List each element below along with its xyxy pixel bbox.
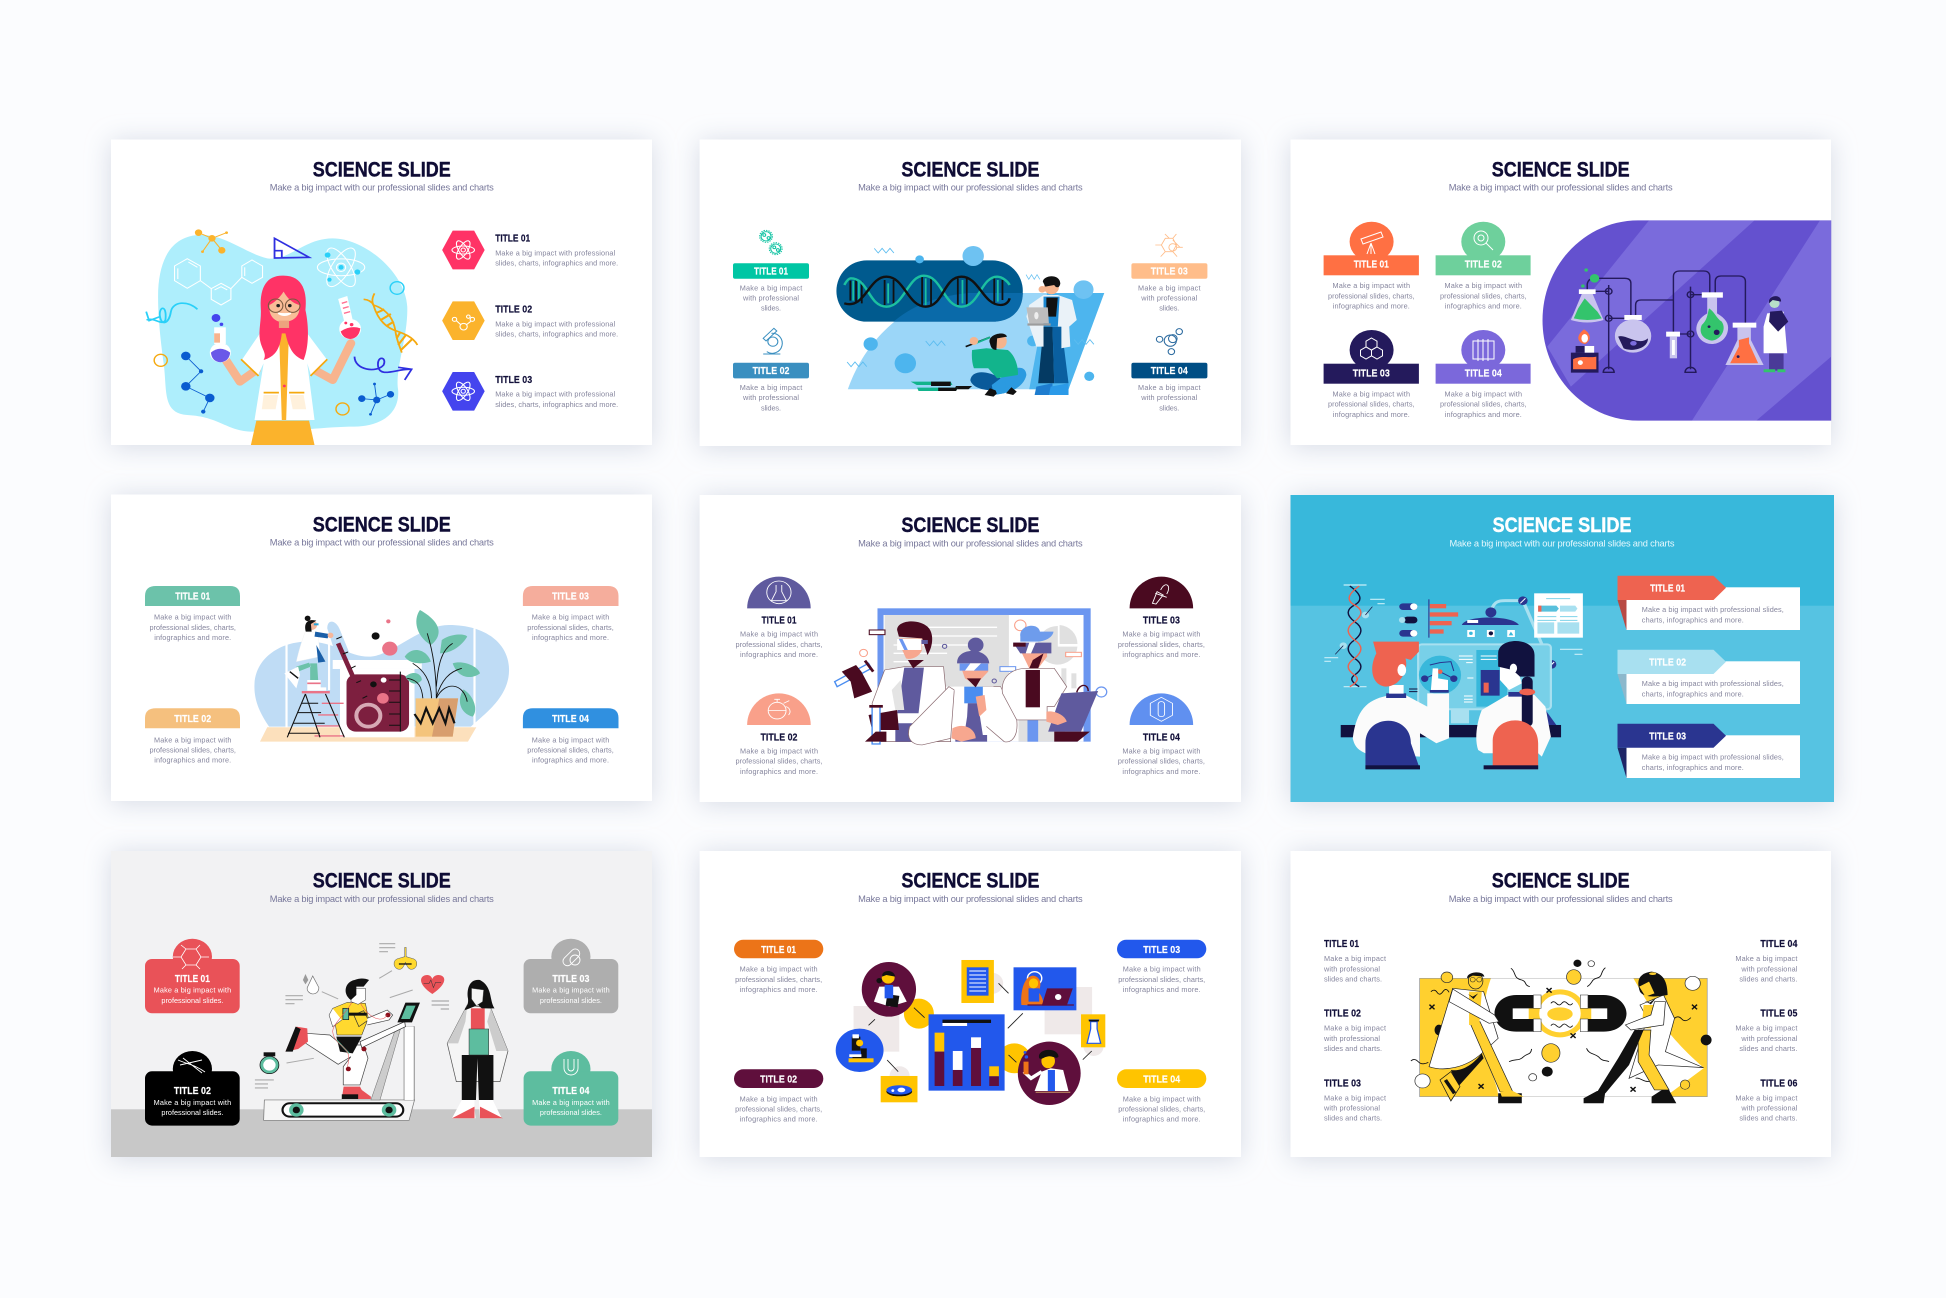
text: title 01 body (735, 965, 822, 994)
text: title 02 body: infographics and more. (1445, 301, 1522, 310)
panel: slide 1 hexagon list (111, 140, 652, 445)
illustration: two researchers at a display (1324, 585, 1583, 769)
text block: title 01: TITLE 01 (495, 233, 530, 245)
text: title 03 body: professional slides, charts, (527, 623, 614, 632)
text block: title 02 body: slides. (761, 403, 781, 412)
illustration: runner on treadmill and doctor (255, 944, 508, 1120)
text: title 02 body: Make a big impact with (154, 735, 231, 744)
text: title 06: TITLE 06 (1760, 1077, 1798, 1089)
bar: title 02: TITLE 02 (752, 365, 790, 377)
text block: title 02: slides, charts, infographics and more. (495, 330, 618, 339)
text: title 03 body: professional slides, charts, (1118, 975, 1205, 984)
text: title 04: TITLE 04 (1143, 732, 1180, 744)
card: title 03: Make a big impact with (532, 986, 610, 995)
text: title 03: Make a big impact with (1122, 630, 1200, 639)
text: title 01 body: infographics and more. (740, 985, 818, 994)
text: title 05: slides and charts. (1739, 1044, 1797, 1053)
pill: title 01 (734, 940, 823, 958)
text: title 03: with professional (1323, 1103, 1380, 1112)
card: title 01: TITLE 01 (175, 973, 210, 985)
text: title 03: infographics and more. (1122, 650, 1200, 659)
text: title 03 body: infographics and more. (1123, 985, 1201, 994)
illustration: DNA capsule and two researchers (836, 246, 1104, 397)
text: title 06 (1735, 1077, 1798, 1122)
text: title 01 body: professional slides, charts, (1328, 291, 1415, 300)
text block: title 01: slides, charts, infographics and more. (495, 259, 618, 268)
title: SCIENCE SLIDE (1492, 514, 1632, 537)
text block: title 02: TITLE 02 (495, 303, 532, 315)
card: title 01 ribbon: Make a big impact with professional slides, (1642, 605, 1784, 614)
bar: title 04 (1131, 363, 1207, 378)
text: title 03 body: Make a big impact with (532, 613, 609, 622)
card: title 03 ribbon: Make a big impact with professional slides, (1642, 753, 1784, 762)
panel: slide 2 DNA research (700, 140, 1241, 446)
subtitle: Make a big impact with our professional slides and charts (1449, 183, 1673, 193)
card: title 03: TITLE 03 (1353, 367, 1390, 379)
icon: semicircle flask purple (747, 577, 811, 608)
subtitle: Make a big impact with our professional slides and charts (858, 539, 1083, 549)
card: title 02 (1436, 222, 1531, 275)
card: title 02 (145, 1051, 240, 1126)
text: title 03 body (1328, 390, 1415, 419)
text: title 02 body: Make a big impact with (740, 1094, 818, 1103)
text: title 03: Make a big impact (1324, 1093, 1386, 1102)
text: title 04 body: infographics and more. (532, 756, 609, 765)
text: title 05: with professional (1740, 1034, 1798, 1043)
text: title 03: professional slides, charts, (1118, 640, 1205, 649)
panel: slide 8 connected research (700, 851, 1241, 1157)
text: title 03: TITLE 03 (1143, 615, 1180, 627)
text: title 06: slides and charts. (1739, 1113, 1797, 1122)
card: title 03 ribbon (1618, 724, 1800, 778)
text: title 04 body: Make a big impact with (1123, 1094, 1201, 1103)
text block: title 04 body (1138, 383, 1201, 412)
pill: title 04: TITLE 04 (1143, 1073, 1180, 1085)
text: title 04 body: professional slides, charts, (1118, 1104, 1205, 1113)
text: title 01 body: infographics and more. (154, 633, 231, 642)
text block: title 02 body: Make a big impact (740, 383, 802, 392)
card: title 02: Make a big impact with (154, 1098, 231, 1107)
pill: title 01: TITLE 01 (761, 944, 796, 956)
text block: title 01 body: with professional (742, 294, 799, 303)
icon: semicircle dropper (1130, 577, 1193, 608)
card: title 01 (145, 939, 240, 1013)
pill: title 03 (1117, 940, 1206, 958)
tab: title 01 (145, 586, 240, 606)
text: title 03 body: infographics and more. (532, 633, 609, 642)
card: title 04: Make a big impact with (532, 1098, 610, 1107)
text: title 02: infographics and more. (740, 767, 818, 776)
text: title 03 body: Make a big impact with (1123, 965, 1201, 974)
text block: title 01 body: Make a big impact (740, 283, 802, 292)
text: title 04: Make a big impact (1735, 954, 1797, 963)
text: title 02: slides and charts. (1324, 1044, 1382, 1053)
text block: title 01: Make a big impact with professional (495, 248, 616, 257)
text: title 04 (1118, 732, 1205, 776)
text: title 01 body: Make a big impact with (154, 613, 231, 622)
text: title 01: with professional (1323, 964, 1380, 973)
illustration: scientist with flasks (146, 229, 417, 445)
text block: title 03 body: slides. (1159, 304, 1179, 313)
panel: slide 5 research team (700, 495, 1241, 802)
text: title 02 body: Make a big impact with (1445, 281, 1522, 290)
text: title 04: with professional (1740, 964, 1798, 973)
card: title 03 (1324, 330, 1419, 384)
text: title 03 body (1118, 965, 1205, 994)
panel: slide 9 magnets tug of war (1290, 851, 1831, 1157)
text block: title 03 body: Make a big impact (1138, 283, 1201, 292)
text: title 01: Make a big impact (1324, 954, 1386, 963)
text: title 02 body: professional slides, charts, (1440, 291, 1527, 300)
diagram: connected chart and researcher circles (836, 960, 1105, 1105)
title: SCIENCE SLIDE (1492, 158, 1630, 181)
card: title 02 ribbon: TITLE 02 (1649, 656, 1686, 668)
title: SCIENCE SLIDE (313, 869, 451, 892)
text: title 04: infographics and more. (1122, 767, 1200, 776)
subtitle: Make a big impact with our professional slides and charts (270, 538, 494, 548)
text: title 06: Make a big impact (1735, 1093, 1797, 1102)
text: title 01 body: Make a big impact with (1333, 281, 1410, 290)
text: title 02: TITLE 02 (760, 732, 798, 744)
text block: title 03: TITLE 03 (495, 374, 532, 386)
text: title 05: Make a big impact (1735, 1024, 1797, 1033)
title: SCIENCE SLIDE (901, 869, 1039, 892)
text: title 02: Make a big impact (1324, 1024, 1386, 1033)
text: title 01: TITLE 01 (762, 615, 797, 627)
text: title 04: TITLE 04 (1760, 938, 1798, 950)
text: title 01 body (1328, 281, 1415, 310)
text: title 01: TITLE 01 (1324, 938, 1359, 950)
icon: hexagon molecule (1155, 234, 1183, 257)
card: title 01 ribbon: charts, infographics and more. (1642, 615, 1744, 624)
card: title 02 ribbon (1618, 650, 1800, 704)
text block: title 02: Make a big impact with professional (495, 319, 616, 328)
text block: title 03 (495, 374, 618, 409)
illustration: purple lab apparatus (1543, 220, 1831, 421)
text: title 03: slides and charts. (1324, 1113, 1382, 1122)
panel: slide 7 treadmill test (111, 851, 652, 1157)
text: title 04 body: professional slides, charts, (527, 745, 614, 754)
text: title 01 body: Make a big impact with (740, 965, 818, 974)
icon: bacteria (760, 230, 782, 255)
text: title 02 body: professional slides, charts, (149, 745, 236, 754)
icon: linked molecule (1156, 329, 1182, 355)
icon: orange hexagon molecule (442, 301, 485, 340)
card: title 02: TITLE 02 (1465, 259, 1502, 271)
text: title 02: professional slides, charts, (736, 757, 822, 766)
tab: title 01: TITLE 01 (175, 591, 210, 603)
text block: title 04 body: slides. (1159, 403, 1179, 412)
text: title 04 body: Make a big impact with (1445, 390, 1522, 399)
text: title 01: infographics and more. (740, 650, 818, 659)
text: title 04 body: infographics and more. (1123, 1115, 1201, 1124)
text: title 02 body (1440, 281, 1527, 310)
text: title 03: TITLE 03 (1324, 1077, 1361, 1089)
card: title 01 ribbon (1618, 576, 1800, 630)
text: title 04 body: Make a big impact with (532, 735, 609, 744)
text: title 04: professional slides, charts, (1118, 757, 1205, 766)
text: title 02 (736, 732, 822, 776)
text block: title 02 body: with professional (742, 393, 799, 402)
card: title 01 ribbon: TITLE 01 (1650, 583, 1685, 595)
card: title 01: professional slides. (161, 996, 223, 1005)
text: title 03 (1323, 1077, 1386, 1122)
bar: title 01 (733, 263, 809, 279)
card: title 03 ribbon: charts, infographics and more. (1642, 763, 1744, 772)
card: title 04: TITLE 04 (552, 1085, 590, 1097)
illustration: scientist on ladder, beaker, plant (254, 610, 509, 742)
icon: semicircle flask salmon (747, 693, 811, 725)
text block: title 04 body: Make a big impact (1138, 383, 1201, 392)
illustration: three scientists and board (835, 608, 1107, 745)
bar: title 03: TITLE 03 (1151, 266, 1188, 278)
icon: blue hexagon atom (442, 372, 485, 411)
text: title 04: Make a big impact with (1122, 746, 1200, 755)
text: title 01 (1323, 938, 1386, 983)
bar: title 03 (1131, 263, 1207, 279)
text block: title 02 (495, 303, 618, 339)
subtitle: Make a big impact with our professional slides and charts (270, 183, 494, 193)
card: title 03: TITLE 03 (552, 973, 590, 985)
text block: title 01 body: slides. (761, 304, 781, 313)
text block: title 04 body: with professional (1140, 393, 1198, 402)
subtitle: Make a big impact with our professional slides and charts (858, 183, 1083, 193)
pill: title 03: TITLE 03 (1143, 944, 1180, 956)
card: title 02 ribbon: charts, infographics and more. (1642, 689, 1744, 698)
card: title 02: professional slides. (161, 1108, 223, 1117)
card: title 04: professional slides. (540, 1108, 602, 1117)
subtitle: Make a big impact with our professional slides and charts (858, 894, 1083, 904)
text block: title 01 body (740, 283, 802, 313)
tab: title 02: TITLE 02 (174, 713, 211, 725)
text: title 02 body: professional slides, charts, (735, 1104, 822, 1113)
title: SCIENCE SLIDE (901, 514, 1039, 537)
icon: microscope (763, 328, 782, 354)
text: title 03 body: infographics and more. (1333, 410, 1410, 419)
card: title 01: TITLE 01 (1354, 259, 1389, 271)
title: SCIENCE SLIDE (901, 158, 1039, 181)
card: title 04 (524, 1051, 618, 1126)
card: title 03 ribbon: TITLE 03 (1649, 730, 1686, 742)
text: title 03 body: Make a big impact with (1333, 390, 1410, 399)
text: title 03 body: professional slides, charts, (1328, 400, 1415, 409)
text: title 02 (1323, 1008, 1386, 1053)
card: title 03 (524, 939, 618, 1013)
text: title 04 body: infographics and more. (1445, 410, 1522, 419)
tab: title 04 (523, 708, 618, 728)
tab: title 03 (523, 586, 618, 606)
text: title 02: Make a big impact with (740, 746, 818, 755)
card: title 01 (1324, 222, 1419, 275)
text: title 01: Make a big impact with (740, 630, 818, 639)
text block: title 01 (495, 233, 618, 268)
panel: slide 6 blue laboratory screen (1290, 495, 1834, 802)
tab: title 03: TITLE 03 (552, 591, 589, 603)
card: title 01: Make a big impact with (154, 986, 231, 995)
text: title 01 (736, 615, 822, 659)
pill: title 02 (734, 1069, 823, 1088)
card: title 04 (1436, 330, 1531, 384)
icon: semicircle test tube (1130, 693, 1193, 725)
text: title 02: with professional (1323, 1034, 1380, 1043)
text: title 04: slides and charts. (1739, 974, 1797, 983)
card: title 03: professional slides. (540, 996, 602, 1005)
panel: slide 4 beaker and plant (111, 494, 652, 801)
text: title 03 (1118, 615, 1205, 659)
text: title 03 body (527, 613, 614, 642)
text block: title 02 body (740, 383, 802, 412)
title: SCIENCE SLIDE (313, 513, 451, 536)
subtitle: Make a big impact with our professional slides and charts (1450, 539, 1675, 549)
text: title 05: TITLE 05 (1760, 1008, 1798, 1020)
text: title 02: TITLE 02 (1324, 1008, 1361, 1020)
subtitle: Make a big impact with our professional slides and charts (1449, 894, 1673, 904)
card: title 04: TITLE 04 (1465, 367, 1502, 379)
text block: title 03: Make a big impact with professional (495, 390, 616, 399)
illustration: two scientists pulling magnets (1411, 960, 1712, 1103)
text: title 01 body: professional slides, charts, (149, 623, 236, 632)
text: title 04 body (1118, 1094, 1205, 1124)
text: title 04 body (527, 735, 614, 765)
tab: title 04: TITLE 04 (552, 713, 589, 725)
icon: red hexagon atom (442, 231, 485, 269)
text: title 01: slides and charts. (1324, 974, 1382, 983)
text block: title 03 body (1138, 283, 1201, 313)
text: title 04 body: professional slides, charts, (1440, 400, 1527, 409)
card: title 02 ribbon: Make a big impact with professional slides, (1642, 679, 1784, 688)
text block: title 03 body: with professional (1140, 294, 1198, 303)
text: title 01 body: infographics and more. (1333, 301, 1410, 310)
text: title 02 body: infographics and more. (740, 1115, 818, 1124)
subtitle: Make a big impact with our professional slides and charts (270, 894, 494, 904)
text: title 05 (1735, 1008, 1798, 1053)
text: title 06: with professional (1740, 1103, 1798, 1112)
title: SCIENCE SLIDE (1492, 869, 1630, 892)
title: SCIENCE SLIDE (313, 158, 451, 181)
bar: title 02 (733, 363, 809, 378)
bar: title 04: TITLE 04 (1151, 365, 1188, 377)
pill: title 04 (1117, 1069, 1206, 1088)
bar: title 01: TITLE 01 (754, 266, 788, 278)
text: title 01: professional slides, charts, (736, 640, 822, 649)
text: title 02 body: infographics and more. (154, 756, 231, 765)
text: title 04 body (1440, 390, 1527, 419)
text block: title 03: slides, charts, infographics and more. (495, 400, 618, 409)
text: title 01 body (149, 613, 236, 642)
text: title 02 body (149, 735, 236, 765)
pill: title 02: TITLE 02 (760, 1073, 797, 1085)
panel: slide 3 laboratory (1290, 140, 1831, 445)
card: title 02: TITLE 02 (174, 1085, 211, 1097)
text: title 02 body (735, 1094, 822, 1124)
text: title 04 (1735, 938, 1798, 983)
tab: title 02 (145, 708, 240, 728)
text: title 01 body: professional slides, charts, (735, 975, 822, 984)
